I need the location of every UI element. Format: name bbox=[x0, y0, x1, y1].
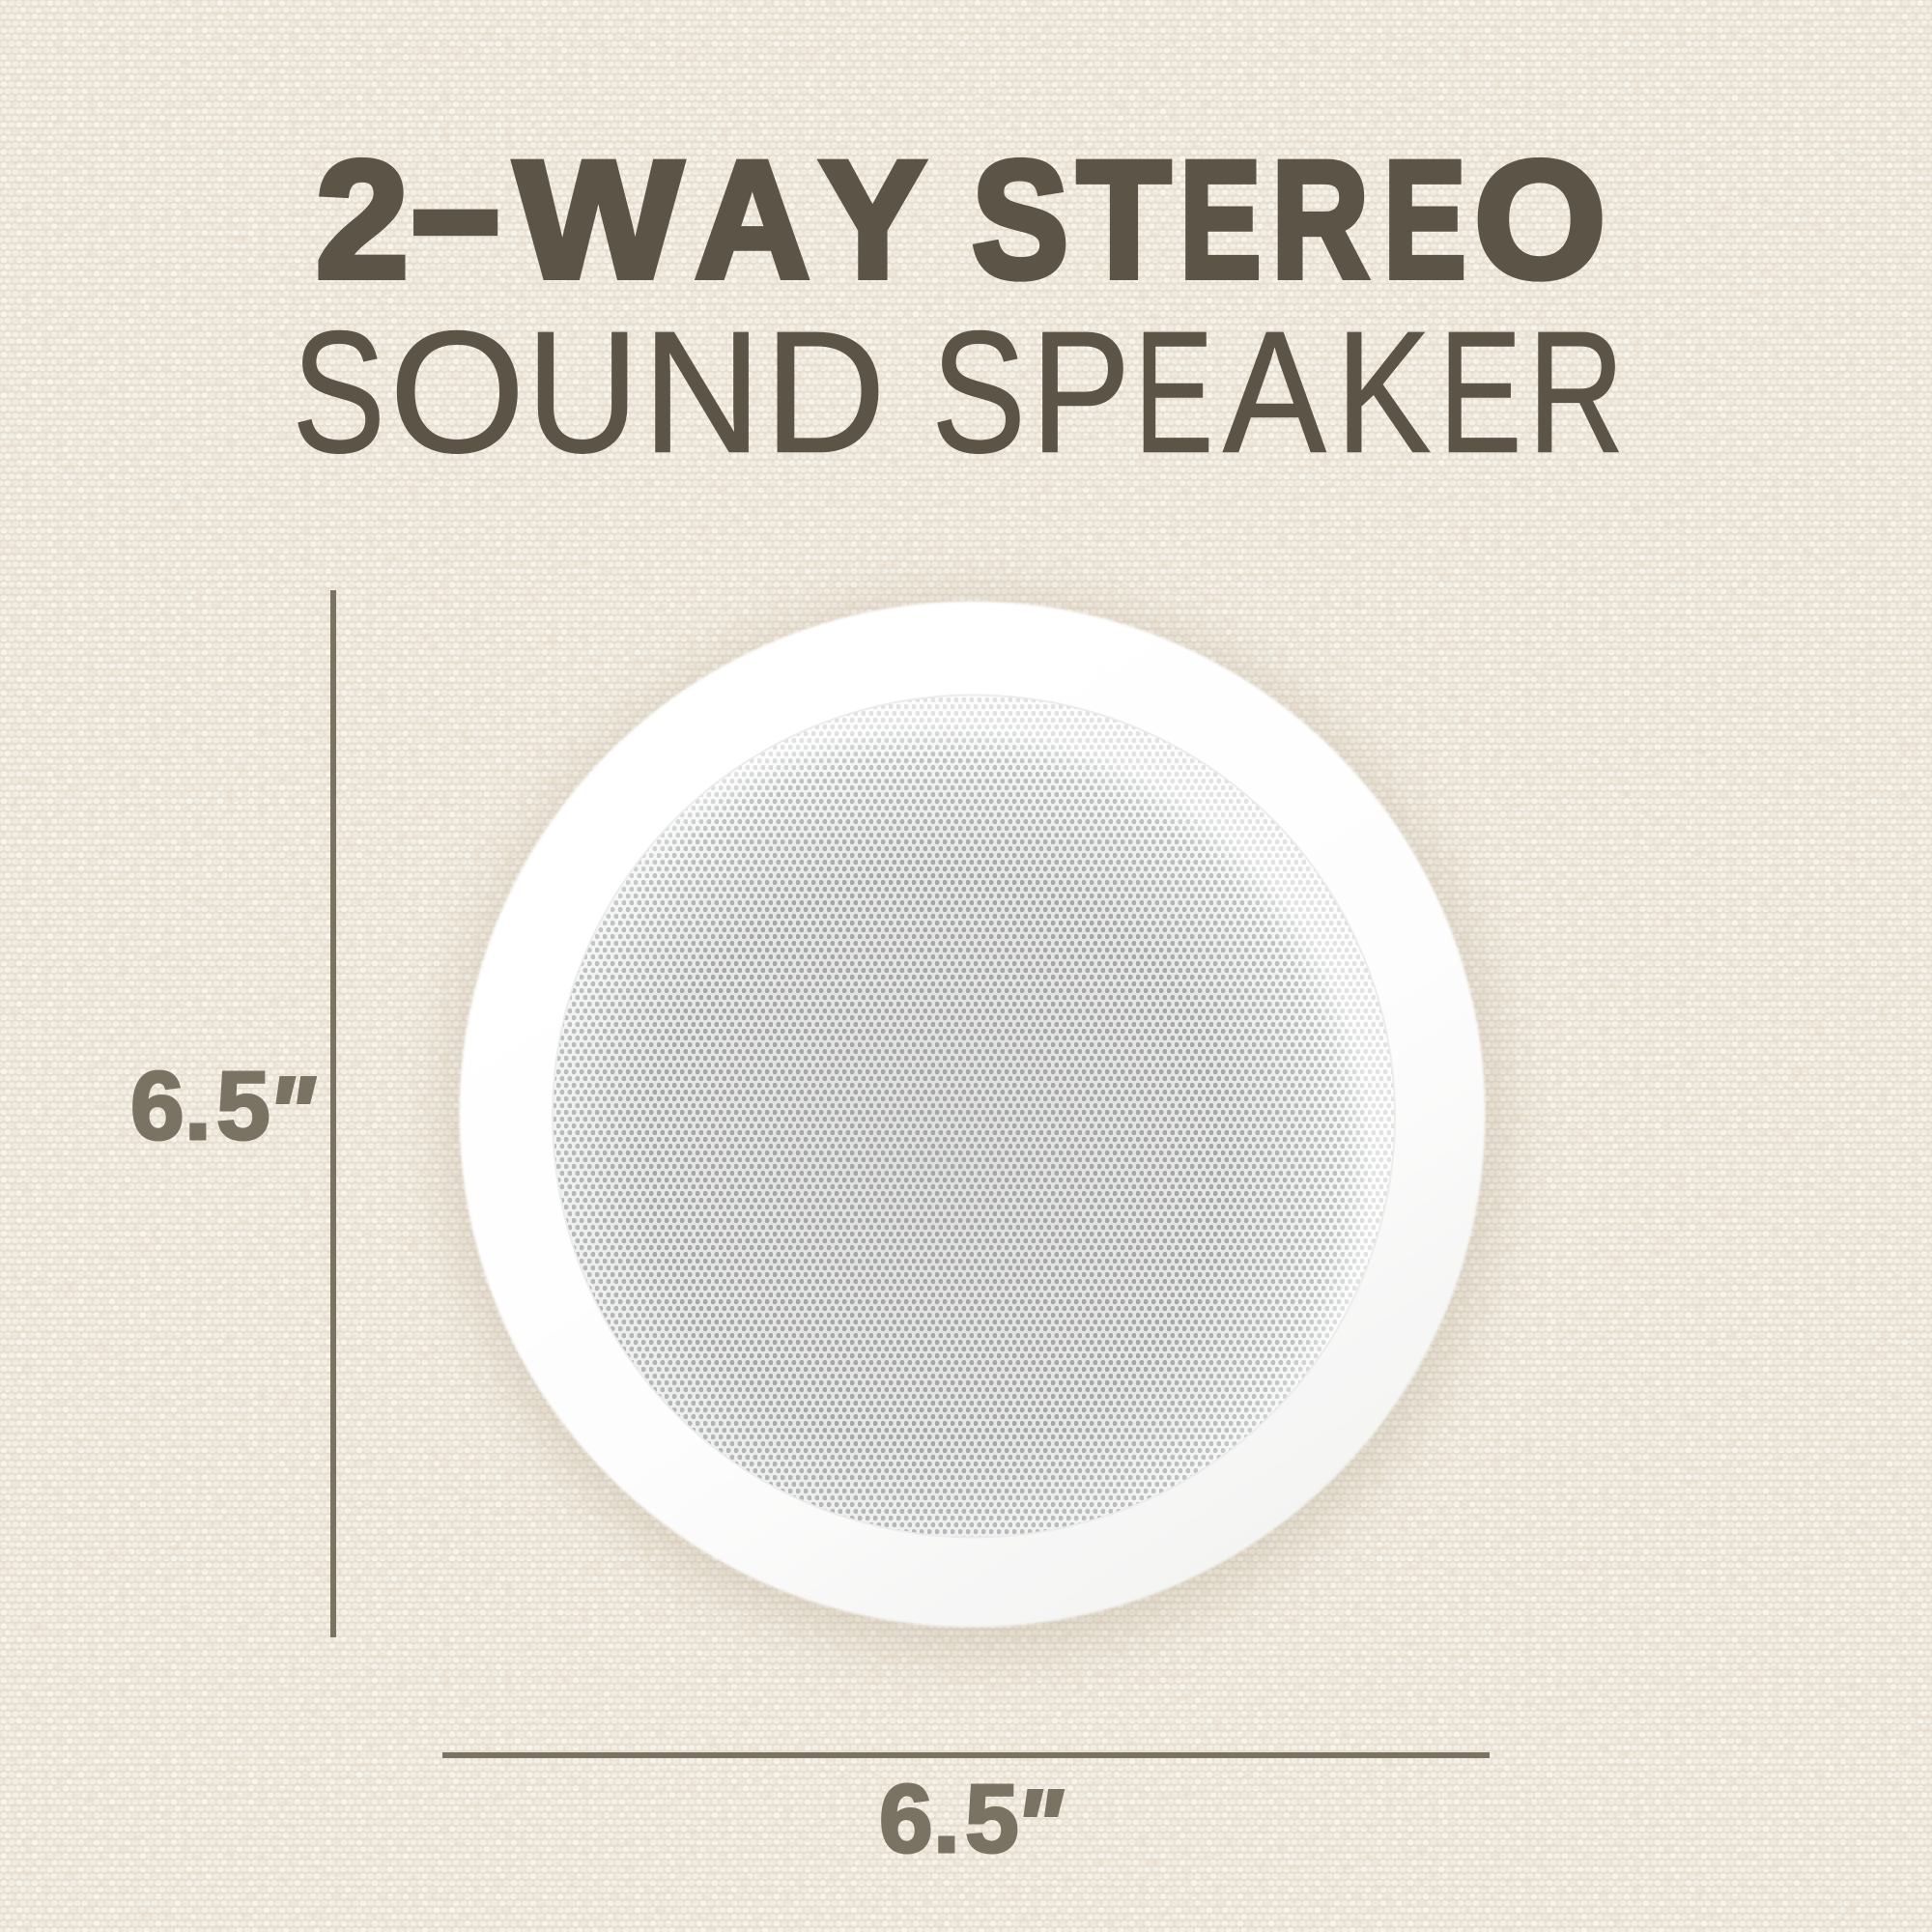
heading: sound speaker: K bbox=[1336, 296, 1431, 489]
heading: 2-way stereo: E bbox=[1179, 128, 1261, 313]
heading: sound speaker: E bbox=[1134, 296, 1213, 489]
heading: sound speaker: A bbox=[1223, 296, 1326, 489]
heading: sound speaker: R bbox=[1528, 296, 1625, 489]
heading: sound speaker: E bbox=[1439, 296, 1521, 489]
dimension label: height 6.5 inches: 6.5 bbox=[130, 1052, 270, 1160]
heading: 2-way stereo: T bbox=[1077, 128, 1171, 313]
heading: 2-way stereo: W bbox=[515, 128, 683, 313]
heading: 2-way stereo: 2 bbox=[316, 128, 409, 313]
dimension label: height 6.5 inches: " bbox=[267, 1057, 316, 1169]
heading: 2-way stereo: O bbox=[1474, 128, 1605, 313]
heading: sound speaker: O bbox=[389, 296, 526, 489]
heading: sound speaker: U bbox=[526, 296, 639, 489]
dimension line: width bbox=[442, 1752, 1490, 1758]
heading: sound speaker: P bbox=[1031, 296, 1130, 489]
dimension label: width 6.5 inches: " bbox=[1014, 1770, 1064, 1882]
speaker outer ring bbox=[460, 601, 1486, 1627]
heading: sound speaker: N bbox=[642, 296, 761, 489]
heading: sound speaker: S bbox=[292, 296, 385, 489]
heading: sound speaker: D bbox=[764, 296, 886, 489]
heading: 2-way stereo: - bbox=[408, 116, 503, 301]
heading: 2-way stereo: E bbox=[1383, 128, 1466, 313]
dimension line: height bbox=[330, 590, 336, 1637]
heading: sound speaker: S bbox=[931, 296, 1026, 489]
speaker grille mesh bbox=[552, 694, 1396, 1538]
dimension label: width 6.5 inches: 6.5 bbox=[879, 1765, 1019, 1873]
speaker shadow bbox=[459, 609, 1492, 1642]
heading: 2-way stereo: A bbox=[696, 128, 810, 313]
heading: 2-way stereo: Y bbox=[819, 128, 925, 313]
speaker bbox=[460, 601, 1486, 1627]
heading: 2-way stereo: S bbox=[972, 128, 1068, 313]
heading: 2-way stereo: R bbox=[1271, 128, 1369, 313]
